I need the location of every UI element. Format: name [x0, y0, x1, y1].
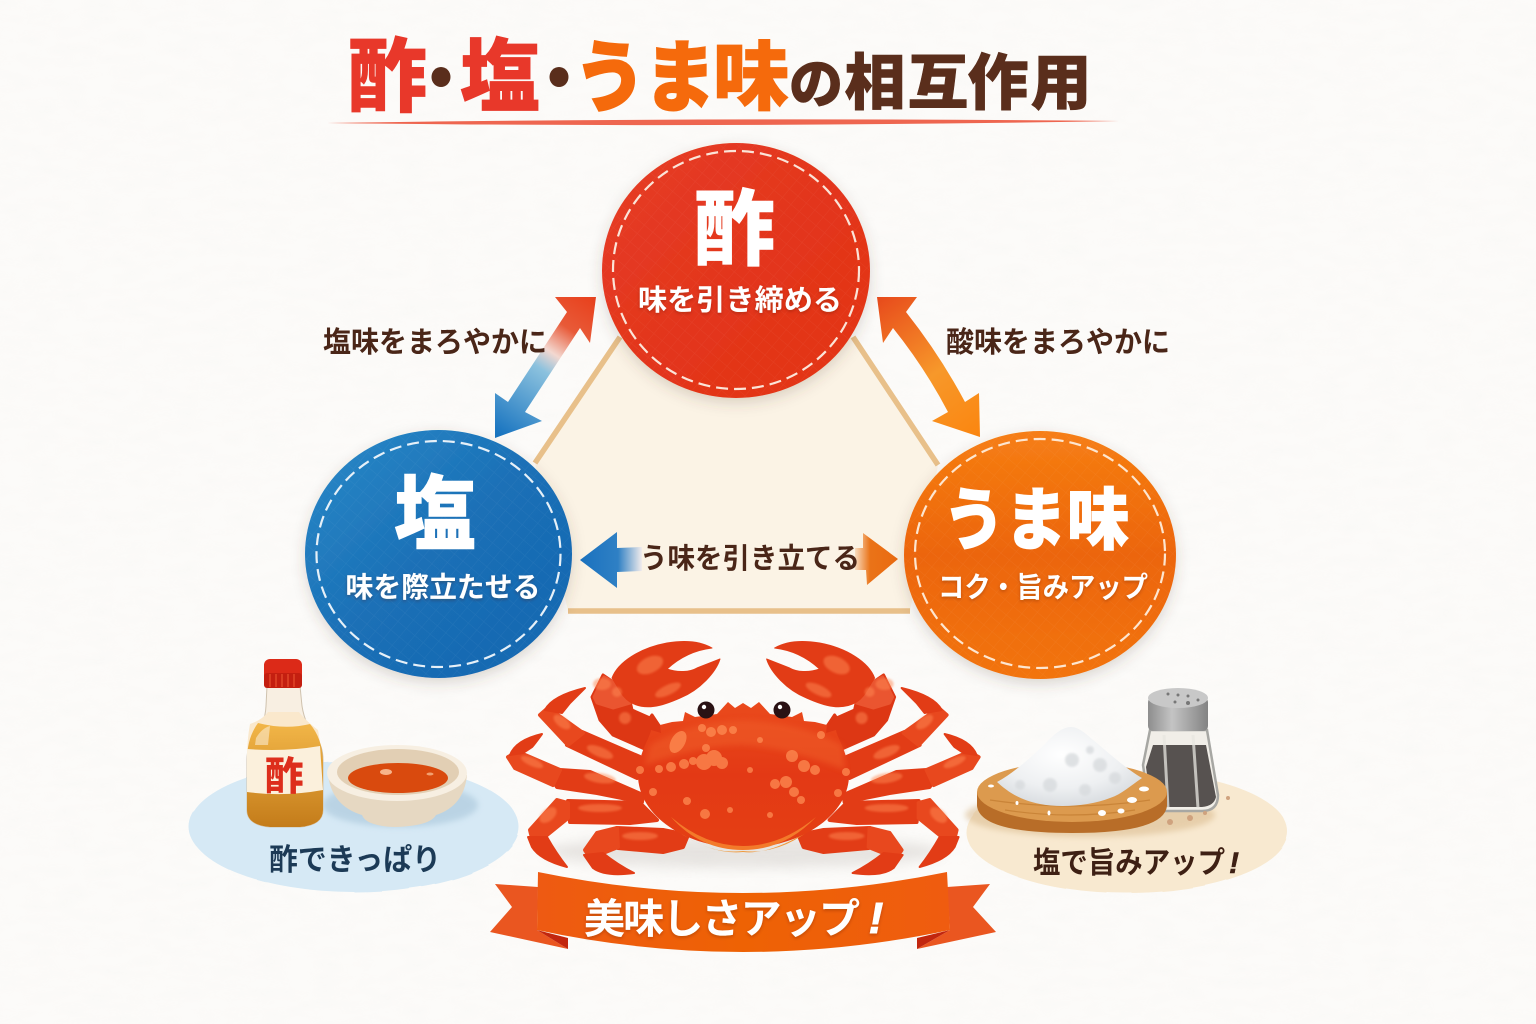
label: salt and umami: う味を引き立てる: [640, 543, 860, 575]
plate shadow: [965, 793, 1215, 837]
triangle connection: [535, 337, 938, 611]
title: [347, 33, 1092, 122]
icon: vinegar bottle: [247, 659, 323, 827]
arrow: salt left head: [580, 532, 642, 588]
crab left legs and claw: [508, 641, 720, 874]
icon: pepper shaker: [1143, 688, 1218, 811]
title: 相: [844, 49, 906, 117]
title: 酢: [347, 33, 427, 122]
arrow: vinegar to umami: [877, 297, 980, 437]
icon: wooden board: [977, 762, 1167, 833]
title: ま: [644, 35, 716, 122]
arrow: salt to vinegar: [495, 297, 596, 438]
arrow: umami right head: [855, 533, 898, 585]
label: vinegar: 酢できっぱり: [269, 844, 441, 877]
circle: vinegar: 味を引き締める: [638, 284, 842, 317]
ribbon left tail: [490, 884, 568, 949]
beige watercolor plate: [966, 771, 1288, 893]
crab shell: [636, 702, 850, 852]
icon: salt mound: [988, 727, 1230, 825]
crab: [508, 641, 979, 874]
vinegar illustration: [189, 659, 519, 892]
circle: umami: うま味: [943, 483, 1129, 559]
label: salt exclamation mark: !: [1229, 847, 1239, 880]
crab shadow: [543, 836, 943, 868]
title: 作: [967, 49, 1029, 117]
title: 塩: [460, 33, 540, 122]
ribbon: [490, 872, 996, 952]
circle: umami: コク・旨みアップ: [938, 572, 1148, 604]
label: vinegar and umami: 酸味をまろやかに: [946, 326, 1170, 359]
icon: sauce bowl: [327, 745, 467, 827]
circle: salt: 味を際立たせる: [346, 572, 540, 604]
ribbon band: [537, 872, 950, 952]
title: 味: [713, 36, 789, 121]
bowl shadow: [322, 783, 478, 827]
circle: salt: 塩: [394, 470, 476, 561]
label: salt: 塩で旨みアップ: [1033, 847, 1225, 880]
ribbon right tail: [917, 884, 996, 949]
title: う: [574, 35, 646, 122]
circle: vinegar: 酢: [693, 185, 775, 276]
title: の: [789, 55, 843, 115]
ribbon exclamation mark: !: [869, 894, 883, 943]
circle: vinegar: [602, 143, 870, 398]
title: 用: [1030, 49, 1092, 117]
title: 互: [907, 49, 969, 117]
crab right legs and claw: [767, 641, 979, 874]
salt illustration: [965, 688, 1288, 893]
label: salt and vinegar: 塩味をまろやかに: [323, 326, 547, 359]
circle: salt: [305, 430, 572, 678]
ribbon text: 美味しさアップ: [584, 896, 860, 942]
circle: umami: [904, 431, 1176, 679]
title underline: [327, 119, 1119, 125]
icon: vinegar bottle: 酢: [264, 756, 304, 799]
blue watercolor plate: [189, 762, 519, 892]
